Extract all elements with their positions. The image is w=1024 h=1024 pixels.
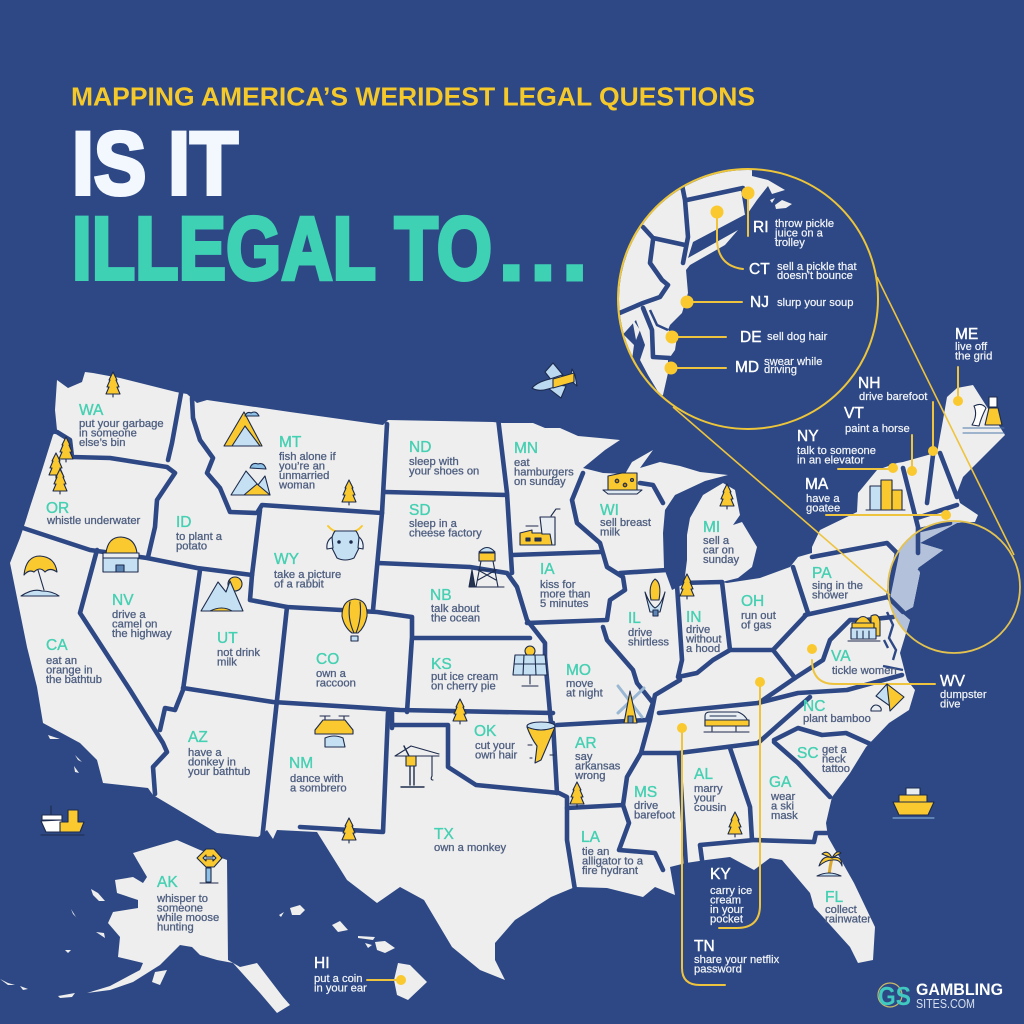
label: MA: MA <box>805 476 829 493</box>
label: ME: the grid <box>955 350 992 362</box>
map: hawaii <box>279 905 427 1000</box>
label: PA: sing in the <box>812 580 863 592</box>
icon: city buildings <box>866 480 905 510</box>
label: AK <box>156 874 219 934</box>
label: ID <box>176 514 223 552</box>
label: AK: someone <box>157 902 203 914</box>
label: LA <box>581 829 644 877</box>
label: VA: tickle women <box>832 665 897 677</box>
label: TX: TX <box>434 826 454 843</box>
icon: road sign <box>197 849 222 883</box>
label: CO: own a <box>316 668 347 680</box>
label: MI: car on <box>703 544 734 556</box>
label: AK: AK <box>157 874 178 891</box>
label: NB: talk about <box>431 603 480 615</box>
label: MS: MS <box>634 784 657 801</box>
label: CO <box>316 651 356 690</box>
label: VT <box>844 405 910 435</box>
label: MO: move <box>566 678 593 690</box>
label: UT: not drink <box>217 647 260 659</box>
label: MD: swear while <box>764 356 822 368</box>
logo: gambling sites: SITES.COM <box>916 997 975 1011</box>
icon: kite <box>871 684 904 711</box>
label: ID: to plant a <box>176 531 223 543</box>
label: SD: SD <box>409 502 431 519</box>
label: MA: goatee <box>806 502 840 514</box>
label: AK: hunting <box>157 922 194 934</box>
label: CA: CA <box>46 637 68 654</box>
label: WV <box>940 673 987 710</box>
label: HI: in your ear <box>314 982 367 994</box>
label: VT: VT <box>844 405 864 422</box>
label: LA: LA <box>581 829 601 846</box>
label: AL: marry <box>694 783 723 795</box>
label: RI: juice on a <box>774 228 824 240</box>
label: SC: get a <box>822 744 848 756</box>
map: california islands <box>48 735 82 773</box>
icon: cruise ship <box>893 788 934 818</box>
label: WA: else’s bin <box>79 437 125 449</box>
label: PA: shower <box>812 590 848 602</box>
label: LA: alligator to a <box>582 856 644 868</box>
label: WA: in someone <box>79 428 137 440</box>
label: LA: tie an <box>582 846 609 858</box>
label: ME <box>955 326 992 362</box>
label: MN: on sunday <box>514 476 566 488</box>
label: OK <box>474 723 518 762</box>
label: MT: fish alone if <box>279 451 336 463</box>
label: KS <box>431 656 498 692</box>
title: illegal to: ... <box>498 194 593 301</box>
label: NH <box>858 375 928 403</box>
label: WA: put your garbage <box>79 418 164 430</box>
label: NH: NH <box>858 375 880 392</box>
label: OK: cut your <box>475 740 515 752</box>
label: KY: pocket <box>710 914 744 926</box>
label: MD <box>735 356 822 376</box>
label: NC: plant bamboo <box>803 713 871 725</box>
icon: cargo ship <box>41 806 84 835</box>
label: CO: CO <box>316 651 339 668</box>
label: AL: your <box>694 792 716 804</box>
label: ME: ME <box>955 326 978 343</box>
label: CA: orange in <box>46 664 93 676</box>
label: FL: rainwater <box>825 914 871 926</box>
label: ID: ID <box>176 514 192 531</box>
label: TX <box>434 826 507 854</box>
map: alaska <box>87 840 290 1013</box>
icon: observatory <box>103 537 139 572</box>
label: AR: arkansas <box>575 760 621 772</box>
map: alaska islands <box>0 889 167 998</box>
icon: trees <box>49 372 742 843</box>
label: WI <box>600 502 652 538</box>
label: MT <box>278 434 336 492</box>
label: NC: NC <box>803 698 825 715</box>
label: MN: eat <box>514 457 530 469</box>
label: RI: RI <box>753 219 768 236</box>
label: GA: GA <box>769 774 792 791</box>
label: WY: take a picture <box>274 569 341 581</box>
label: MO: MO <box>566 662 591 679</box>
label: MN: MN <box>514 440 538 457</box>
label: SC: neck <box>822 754 846 766</box>
label: MT: unmarried <box>279 470 329 482</box>
label: ND: your shoes on <box>409 466 479 478</box>
logo: gambling sites <box>878 980 1003 1011</box>
label: IN: without <box>685 634 722 646</box>
label: OK: own hair <box>475 750 518 762</box>
label: IA: IA <box>540 561 555 578</box>
label: NV <box>112 592 172 640</box>
label: PA: PA <box>812 565 832 582</box>
logo: gambling sites: GS <box>878 981 911 1011</box>
label: NM: a sombrero <box>290 782 347 794</box>
label: NY: in an elevator <box>797 454 864 466</box>
label: RI: trolley <box>775 237 805 249</box>
label: AZ: your bathtub <box>188 766 250 778</box>
label: NB <box>430 587 480 624</box>
label: KY: cream <box>710 894 741 906</box>
label: SD: cheese factory <box>409 528 482 540</box>
label: MO <box>566 662 604 700</box>
magnifier panel: north-east detail <box>600 160 878 429</box>
icon: tornado <box>527 722 555 763</box>
label: MN: hamburgers <box>514 466 574 478</box>
label: OR: OR <box>46 500 69 517</box>
logo: gambling sites: GAMBLING <box>916 980 1003 999</box>
label: TN <box>694 938 780 976</box>
label: WY <box>274 551 341 590</box>
label: DE: sell dog hair <box>767 331 828 343</box>
label: GA: a ski <box>771 800 794 812</box>
label: AL: AL <box>694 766 713 783</box>
label: KS: put ice cream <box>431 671 498 683</box>
label: AZ: donkey in <box>188 756 236 768</box>
label: AZ: AZ <box>188 729 208 746</box>
label: MS <box>634 784 676 822</box>
label: OR: whistle underwater <box>46 515 141 527</box>
label: DE: DE <box>740 329 762 346</box>
label: MO: at night <box>566 688 604 700</box>
label: NM <box>289 755 347 794</box>
label: NJ: NJ <box>750 294 769 311</box>
label: MS: drive <box>634 800 658 812</box>
label: WV: dumpster <box>940 689 987 701</box>
label: ND: sleep with <box>409 456 459 468</box>
icon: cheese <box>603 473 642 494</box>
label: OH: OH <box>741 593 764 610</box>
icon: flying car <box>315 716 353 747</box>
label: TX: own a monkey <box>434 842 507 854</box>
label: NJ <box>750 294 854 311</box>
label: AR: wrong <box>574 770 605 782</box>
label: NM: NM <box>289 755 313 772</box>
label: WI: sell breast <box>600 517 652 529</box>
label: OR <box>46 500 141 527</box>
label: MT: you’re an <box>279 460 325 472</box>
label: IA: more than <box>540 588 590 600</box>
label: IN: IN <box>686 609 702 626</box>
label: GA <box>769 774 798 822</box>
label: SC <box>797 744 850 775</box>
label: MT: MT <box>279 434 302 451</box>
label: UT: milk <box>217 656 237 668</box>
icon: crane <box>395 746 439 787</box>
label: IA: 5 minutes <box>540 598 589 610</box>
label: ME: live off <box>955 341 988 353</box>
label: CT: doesn’t bounce <box>777 270 853 282</box>
label: CA: the bathtub <box>46 674 102 686</box>
label: WI: WI <box>600 502 619 519</box>
label: NY <box>797 428 876 466</box>
label: AZ: have a <box>188 747 222 759</box>
label: NB: the ocean <box>431 612 480 624</box>
label: IN: drive <box>686 624 710 636</box>
label: AL <box>694 766 726 814</box>
label: NY: talk to someone <box>797 445 876 457</box>
label: MI: sunday <box>703 554 739 566</box>
label: WY: of a rabbit <box>274 578 325 590</box>
label: OH: run out <box>741 610 777 622</box>
label: FL: collect <box>825 904 858 916</box>
label: MN <box>514 440 574 488</box>
label: IL: shirtless <box>628 636 669 648</box>
icon: beach umbrella <box>21 556 59 596</box>
icon: mountain with cloud <box>224 412 262 446</box>
icon: train <box>704 712 749 732</box>
map: contiguous united states <box>10 372 1005 980</box>
label: VA <box>831 648 897 677</box>
label: KY: in your <box>710 904 744 916</box>
label: CA <box>46 637 102 686</box>
label: DE <box>740 329 828 346</box>
label: MI: MI <box>703 519 720 536</box>
label: MD: driving <box>764 364 797 376</box>
label: ID: potato <box>176 540 207 552</box>
label: GA: mask <box>771 810 798 822</box>
label: NV: NV <box>112 592 134 609</box>
label: NV: the highway <box>112 628 172 640</box>
label: AR <box>574 735 621 782</box>
label: WI: milk <box>600 526 620 538</box>
label: SC: SC <box>797 745 819 762</box>
label: NY: NY <box>797 428 819 445</box>
label: KS: on cherry pie <box>431 680 496 692</box>
label: OH <box>741 593 777 632</box>
label: MI: sell a <box>703 535 730 547</box>
label: NC <box>803 698 871 725</box>
small zoom circle on map <box>888 521 1020 653</box>
label: FL <box>825 889 871 926</box>
label: GA: wear <box>770 791 796 803</box>
label: NB: NB <box>430 587 452 604</box>
label: KS: KS <box>431 656 452 673</box>
label: TN: TN <box>694 938 715 955</box>
label: WY: WY <box>274 551 299 568</box>
label: CT: CT <box>749 261 770 278</box>
icon: mountains with sun <box>201 577 243 611</box>
icon: water tower <box>469 548 504 587</box>
label: SD: sleep in a <box>409 518 458 530</box>
pins and leader lines <box>367 186 963 985</box>
label: HI: HI <box>314 955 330 972</box>
icon: solar panel <box>513 646 547 686</box>
label: CT: sell a pickle that <box>777 261 857 273</box>
label: AR: AR <box>575 735 597 752</box>
label: MS: barefoot <box>634 810 676 822</box>
label: WA <box>79 402 164 449</box>
label: CO: raccoon <box>316 678 356 690</box>
label: AR: say <box>575 751 593 763</box>
label: OH: of gas <box>741 620 772 632</box>
label: RI <box>753 218 834 249</box>
label: LA: fire hydrant <box>582 865 639 877</box>
label: SD <box>409 502 482 540</box>
title: is it: IS IT <box>72 113 238 213</box>
icon: lighthouse <box>963 397 1004 433</box>
label: HI <box>314 955 367 994</box>
label: OK: OK <box>474 723 497 740</box>
icon: palm tree <box>817 852 842 876</box>
label: MI <box>703 519 739 566</box>
label: AL: cousin <box>694 802 726 814</box>
icon: hot air balloon <box>342 599 367 641</box>
icon: corn <box>645 579 665 616</box>
label: MA: have a <box>806 493 840 505</box>
label: TN: password <box>694 964 742 976</box>
label: HI: put a coin <box>314 973 363 985</box>
icon: windmill <box>618 686 644 723</box>
label: ND <box>409 439 479 478</box>
label: NJ: slurp your soup <box>777 297 854 309</box>
label: KY: carry ice <box>710 885 752 897</box>
label: RI: throw pickle <box>775 218 834 230</box>
label: VT: paint a horse <box>845 423 910 435</box>
label: UT: UT <box>217 630 238 647</box>
title: illegal to: ILLEGAL TO <box>72 198 492 298</box>
subtitle: MAPPING AMERICA’S WERIDEST LEGAL QUESTIONS <box>71 82 755 112</box>
label: CA: eat an <box>46 655 77 667</box>
label: VA: VA <box>831 648 851 665</box>
label: IA <box>540 561 590 610</box>
label: NH: drive barefoot <box>859 391 928 403</box>
label: UT <box>217 630 260 668</box>
icon: snowy mountains with cloud <box>231 464 270 495</box>
label: AK: whisper to <box>156 893 208 905</box>
label: IL <box>628 610 669 648</box>
label: NM: dance with <box>290 773 344 785</box>
label: PA <box>812 565 863 602</box>
label: NV: camel on <box>112 618 157 630</box>
icon: bull head <box>327 526 363 560</box>
label: IL: IL <box>628 610 641 627</box>
label: AZ <box>188 729 250 778</box>
label: CT <box>749 261 857 282</box>
icon: capitol building <box>848 615 880 641</box>
zoom lens: connector lines <box>673 277 1014 595</box>
label: MA <box>805 476 840 514</box>
label: MD: MD <box>735 359 759 376</box>
label: SC: tattoo <box>822 763 850 775</box>
label: AK: while moose <box>156 912 219 924</box>
label: MT: woman <box>278 480 315 492</box>
label: IN <box>685 609 722 655</box>
label: ND: ND <box>409 439 431 456</box>
label: WV: dive <box>940 698 961 710</box>
label: WV: WV <box>940 673 966 690</box>
label: TN: share your netflix <box>694 954 780 966</box>
label: IN: a hood <box>686 643 720 655</box>
label: IA: kiss for <box>540 579 576 591</box>
label: IL: drive <box>628 627 652 639</box>
icon: factory <box>520 509 560 545</box>
label: FL: FL <box>825 889 843 906</box>
icon: airplane <box>532 363 577 398</box>
label: KY <box>710 866 752 926</box>
label: NV: drive a <box>112 609 146 621</box>
label: WA: WA <box>79 402 104 419</box>
label: KY: KY <box>710 866 731 883</box>
